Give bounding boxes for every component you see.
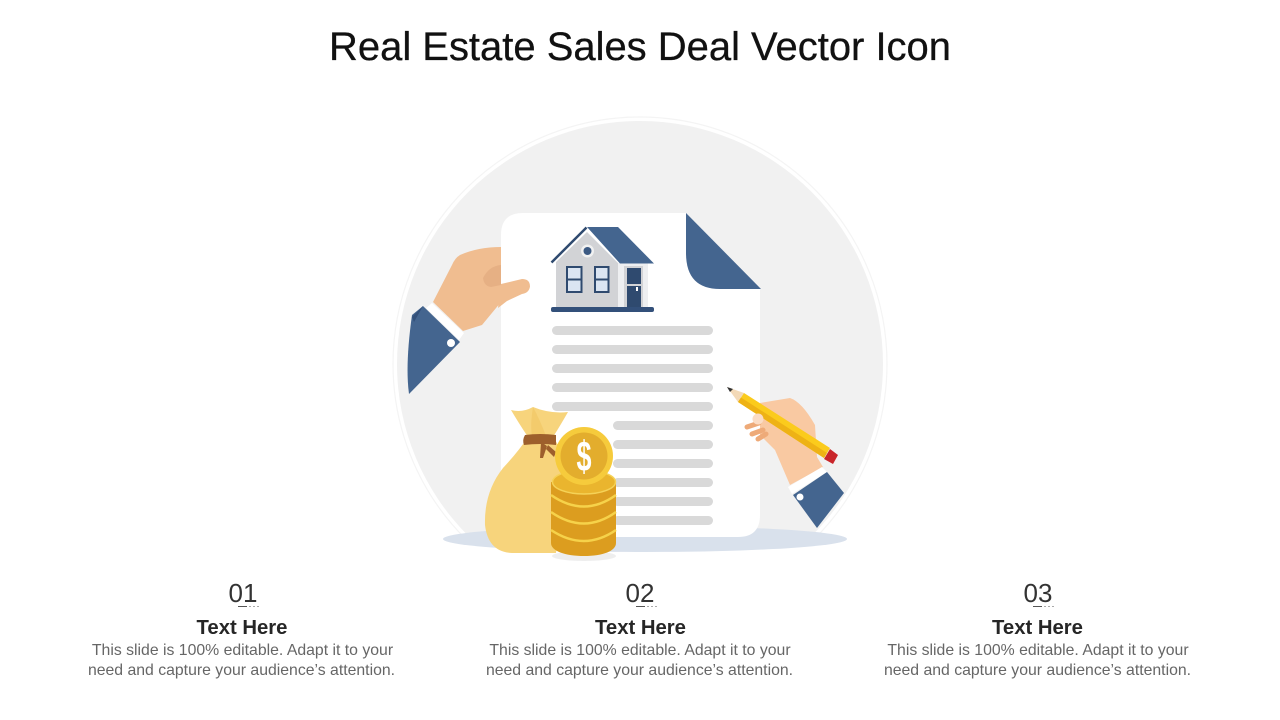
heading: Text Here [992, 617, 1083, 639]
icon: money bag [485, 407, 568, 553]
text lines [552, 326, 713, 525]
thumb [498, 279, 530, 308]
left hand holding page [408, 247, 530, 394]
heading: Text Here [595, 617, 686, 639]
title: Real Estate Sales Deal Vector Icon [329, 25, 951, 69]
sleeve [793, 472, 844, 528]
description: need and capture your audience’s attention. [486, 662, 793, 679]
number: 01 [229, 578, 257, 608]
heading: Text Here [197, 617, 287, 639]
icon: dollar coin [555, 427, 613, 485]
hand [760, 398, 823, 485]
background circle [392, 116, 888, 534]
description: need and capture your audience’s attention. [88, 662, 395, 679]
column 02 [486, 578, 793, 679]
hand palm [433, 247, 501, 331]
sleeve [408, 306, 460, 394]
icon: coin stack [551, 470, 616, 561]
ground shadow [443, 526, 847, 552]
folded corner [686, 213, 761, 289]
shirt cuff [788, 467, 827, 494]
shirt cuff [426, 303, 464, 340]
number: 03 [1024, 578, 1052, 608]
fingers [747, 423, 766, 439]
document page [501, 213, 760, 537]
pencil [727, 387, 838, 464]
icon: house [551, 227, 654, 312]
icon: dollar coin: $ [576, 433, 592, 481]
description: need and capture your audience’s attention. [884, 662, 1191, 679]
document [501, 213, 761, 537]
column 01 [88, 578, 395, 679]
bag tie [523, 434, 556, 445]
column 03 [884, 578, 1191, 679]
number: 02 [626, 578, 654, 608]
right hand with pencil [727, 387, 844, 528]
thumb base shadow [483, 265, 501, 287]
cuff button [796, 494, 804, 500]
cuff button [447, 339, 455, 347]
description: This slide is 100% editable. Adapt it to your [489, 642, 791, 659]
description: This slide is 100% editable. Adapt it to your [92, 642, 393, 659]
description: This slide is 100% editable. Adapt it to your [887, 642, 1189, 659]
fingertip [752, 414, 764, 424]
